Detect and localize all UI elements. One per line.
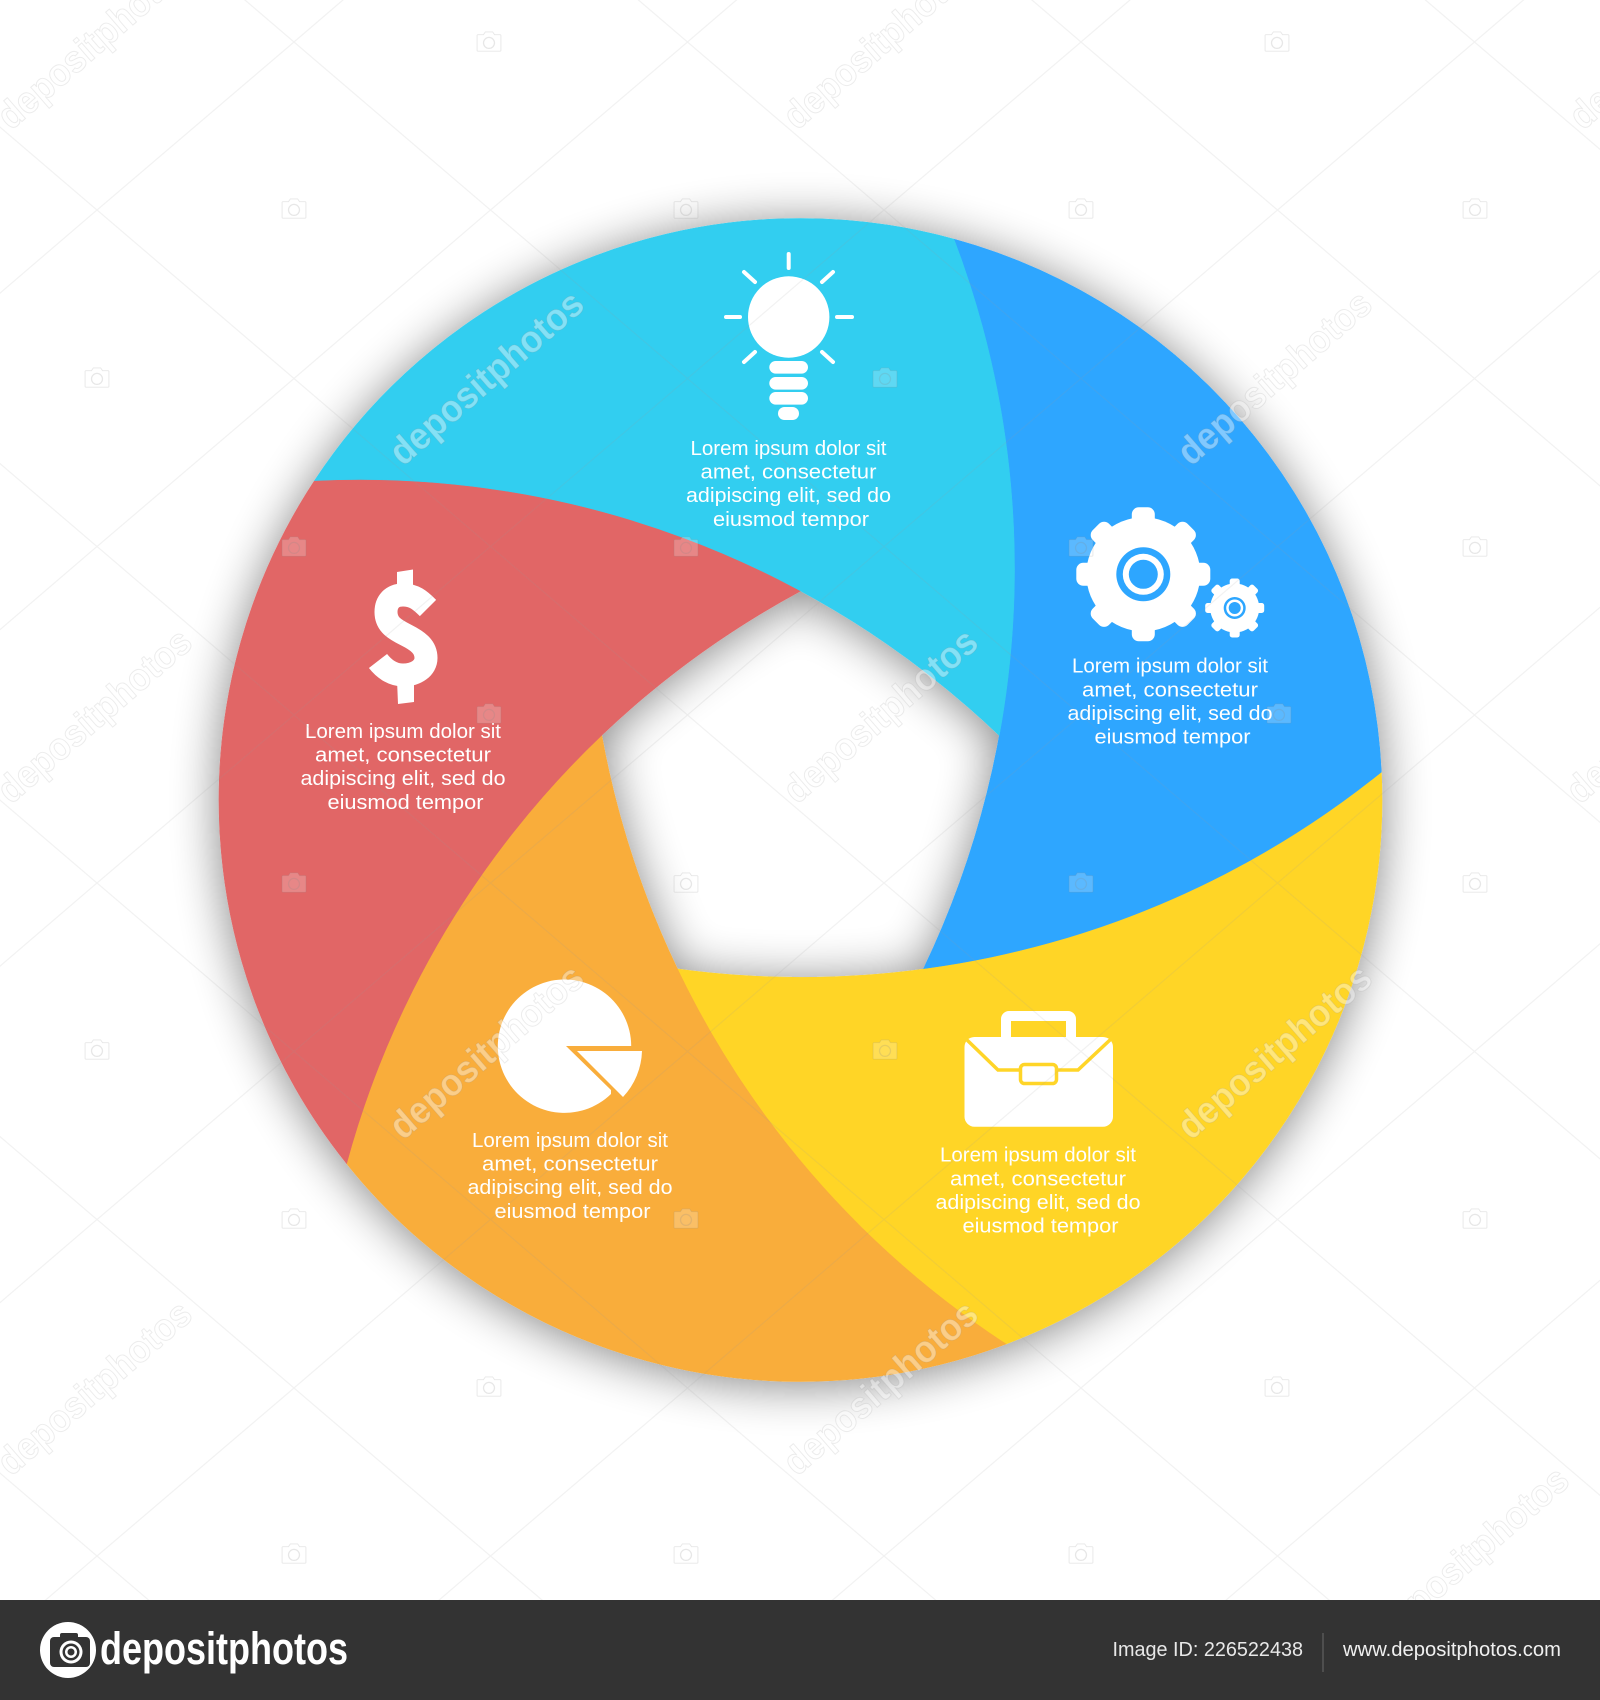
segment: blue [923,239,1381,969]
text: yellow segment [936,1145,1140,1238]
text: red segment: Lorem ipsum dolor sit [305,721,501,743]
text: yellow segment: amet, consectetur [950,1168,1126,1190]
watermark layer: depositphotos [381,283,592,474]
text: orange segment: eiusmod tempor [494,1201,651,1223]
text: cyan segment: eiusmod tempor [713,509,869,531]
text: red segment: eiusmod tempor [328,792,484,814]
text: orange segment: Lorem ipsum dolor sit [472,1130,668,1152]
icon: pie chart [498,979,642,1113]
icon: light bulb [726,254,852,420]
watermark layer: depositphotos [1366,1459,1577,1650]
text: orange segment: adipiscing elit, sed do [468,1177,672,1199]
segment: red [1,322,801,1182]
text: red segment [300,721,506,814]
watermark layer: depositphotos [1169,957,1380,1148]
watermark layer: depositphotos [1169,283,1380,474]
segment: orange [231,735,1031,1595]
text: blue segment: eiusmod tempor [1094,727,1251,749]
watermark layer: depositphotos [775,1293,986,1484]
text: red segment: adipiscing elit, sed do [300,768,506,790]
image id: Image ID: 226522438 [1112,1639,1303,1661]
segment: cyan [305,74,1141,735]
icon: dollar sign [378,570,428,704]
text: blue segment: adipiscing elit, sed do [1068,703,1272,725]
text: red segment: amet, consectetur [315,745,491,767]
text: yellow segment: Lorem ipsum dolor sit [940,1145,1136,1167]
watermark layer: depositphotos [381,957,592,1148]
text: cyan segment: adipiscing elit, sed do [686,485,891,507]
icon: gears [1076,507,1264,641]
text: orange segment: amet, consectetur [482,1154,658,1176]
text: cyan segment: amet, consectetur [700,462,877,484]
segment: yellow [678,743,1513,1405]
text: cyan segment [686,438,891,531]
text: blue segment: amet, consectetur [1082,679,1258,701]
text: cyan segment: Lorem ipsum dolor sit [690,438,887,460]
logo wordmark: depositphotos [100,1623,348,1674]
text: orange segment [468,1130,672,1223]
text: blue segment [1068,656,1272,748]
watermark layer: depositphotos [775,621,986,812]
icon: briefcase [964,1011,1113,1127]
text: yellow segment: adipiscing elit, sed do [936,1192,1140,1214]
text: blue segment: Lorem ipsum dolor sit [1072,656,1268,678]
website url: www.depositphotos.com [1342,1639,1561,1661]
text: yellow segment: eiusmod tempor [962,1215,1119,1237]
footer bar [0,1600,1600,1700]
logo: camera badge [40,1622,96,1678]
divider [1322,1633,1324,1672]
